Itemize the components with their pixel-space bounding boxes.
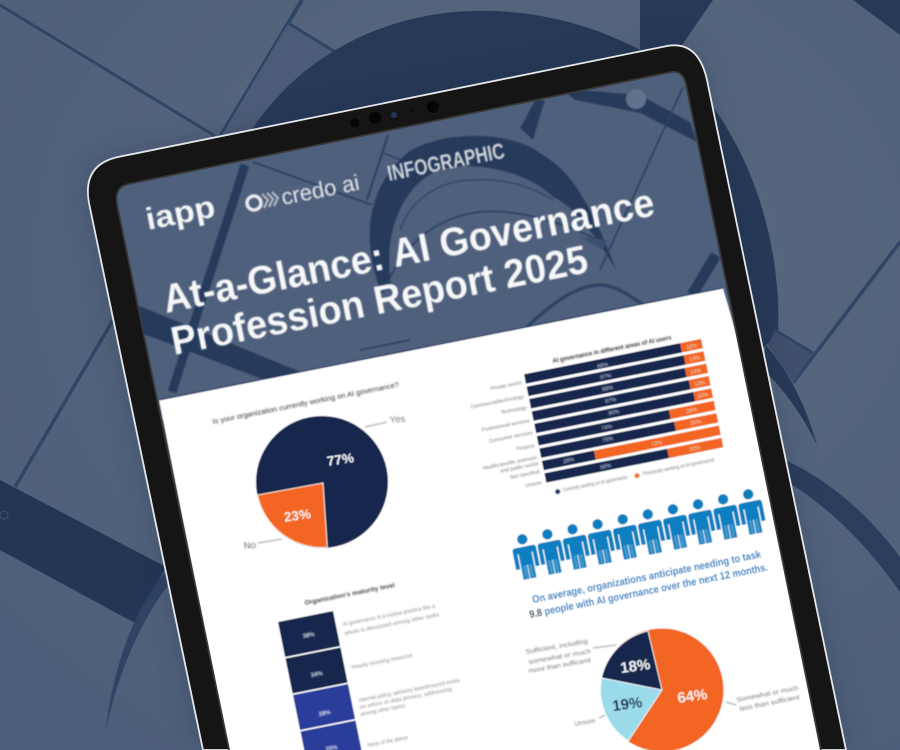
bar values: 13%	[694, 380, 706, 388]
bar values: 72%	[651, 440, 663, 448]
bar chart legend	[555, 457, 715, 494]
label: yes	[365, 414, 406, 427]
label: sufficient: somewhat or much	[528, 648, 592, 666]
pie chart: 23%	[283, 506, 312, 525]
header text and logos	[143, 138, 658, 364]
label: sufficient	[525, 638, 616, 675]
stack descriptions: among other topics	[360, 703, 406, 718]
stacked bars	[525, 344, 722, 478]
row labels	[470, 380, 542, 489]
label: less than sufficient: Somewhat or much	[736, 685, 800, 704]
row labels: Technology	[500, 405, 528, 416]
bar values: 90%	[608, 409, 620, 417]
row labels: Consumer services	[489, 430, 534, 445]
label: less than sufficient: less than sufficient	[739, 694, 800, 713]
stack descriptions: Heavily investing resources	[351, 653, 413, 671]
title	[166, 194, 654, 356]
stacked blocks: 34%	[310, 671, 324, 679]
stack descriptions: Internal policy, advisory board/council exists	[358, 678, 461, 704]
bar chart legend: Currently working on AI governance	[562, 475, 628, 493]
label: no: No	[243, 540, 256, 552]
row labels: Healthcare/life sciences	[482, 455, 538, 472]
row labels: Unsure	[525, 480, 542, 489]
row labels: Private sector	[490, 380, 523, 392]
title: Profession Report 2025	[167, 238, 592, 364]
pie chart: 19%	[611, 694, 643, 715]
pie heading: Is your organization currently working on AI governance?	[212, 382, 400, 426]
bar values: 14%	[690, 368, 702, 376]
label: yes: Yes	[389, 414, 406, 426]
row labels: Professional services	[481, 418, 531, 434]
callout: people needed for AI governance: On average, organizations anticipate needing to task	[531, 548, 762, 606]
row labels: Not specified	[510, 469, 540, 481]
callout: people needed for AI governance: 9.8 people with AI governance over the next 12 months.	[528, 562, 769, 621]
bar values: 26%	[686, 407, 698, 415]
logo: iapp: iapp	[143, 189, 218, 237]
bar values: 25%	[690, 419, 702, 427]
stack descriptions: None of the above	[367, 735, 409, 749]
screen content	[100, 60, 860, 750]
row labels: and public sector	[500, 461, 540, 475]
label: less than sufficient	[726, 685, 800, 713]
panel: working on AI governance pie	[212, 382, 406, 552]
bar values: 13%	[689, 355, 701, 363]
pie chart: 18%	[619, 656, 651, 677]
tablet bezel	[88, 45, 846, 750]
white report panel	[159, 288, 860, 750]
bar chart legend: Previously working on AI governance	[642, 457, 715, 477]
label: no	[243, 539, 282, 552]
label: sufficient: Sufficient, including	[525, 638, 589, 656]
bar values: 87%	[600, 373, 612, 381]
panel: organization's maturity stack	[278, 582, 461, 750]
bar values: 87%	[605, 397, 617, 405]
logo: credo ai: credo ai	[279, 170, 361, 210]
panel: staffing sufficiency pie	[525, 628, 800, 750]
bar values: 86%	[602, 385, 614, 393]
stack descriptions: on ethics or data privacy, addressing	[359, 687, 453, 711]
label: sufficient: more than sufficient	[528, 657, 592, 675]
bar values: 68%	[600, 463, 612, 471]
bar chart heading: AI governance in different areas of AI users	[552, 335, 673, 365]
bar values: 75%	[602, 436, 614, 444]
tablet shadow	[88, 45, 846, 750]
pie chart	[600, 628, 724, 750]
label: unsure	[574, 715, 605, 728]
stack heading: Organization's maturity level	[304, 582, 396, 607]
bar values: 28%	[563, 457, 575, 465]
pie chart: 64%	[676, 686, 708, 707]
bar values: 32%	[689, 445, 701, 453]
stacked blocks	[278, 611, 363, 750]
title: At-a-Glance: AI Governance	[159, 181, 658, 322]
stacked blocks: 28%	[318, 710, 332, 718]
stacked blocks: 38%	[302, 632, 316, 640]
header artwork	[117, 72, 753, 420]
stack descriptions: AI governance is a routine practice like a	[342, 603, 436, 628]
pie chart: 77%	[326, 450, 355, 469]
bar values	[563, 343, 709, 471]
stack descriptions: whole is discussed among other tasks	[343, 612, 440, 637]
bar values: 12%	[686, 343, 698, 351]
stack descriptions	[342, 603, 461, 749]
label: unsure: Unsure	[574, 717, 596, 728]
row labels: Commercial/technology	[470, 394, 525, 411]
bar values: 10%	[697, 392, 709, 400]
row labels: Finance	[516, 443, 535, 453]
people pictogram: ten figures	[510, 487, 768, 581]
label: infographic: INFOGRAPHIC	[385, 138, 507, 186]
bar values: 74%	[601, 424, 613, 432]
front cameras and sensors	[350, 101, 439, 128]
panel: bar chart of AI governance areas	[470, 335, 722, 494]
pie chart	[256, 416, 388, 548]
bar values: 88%	[597, 362, 609, 370]
